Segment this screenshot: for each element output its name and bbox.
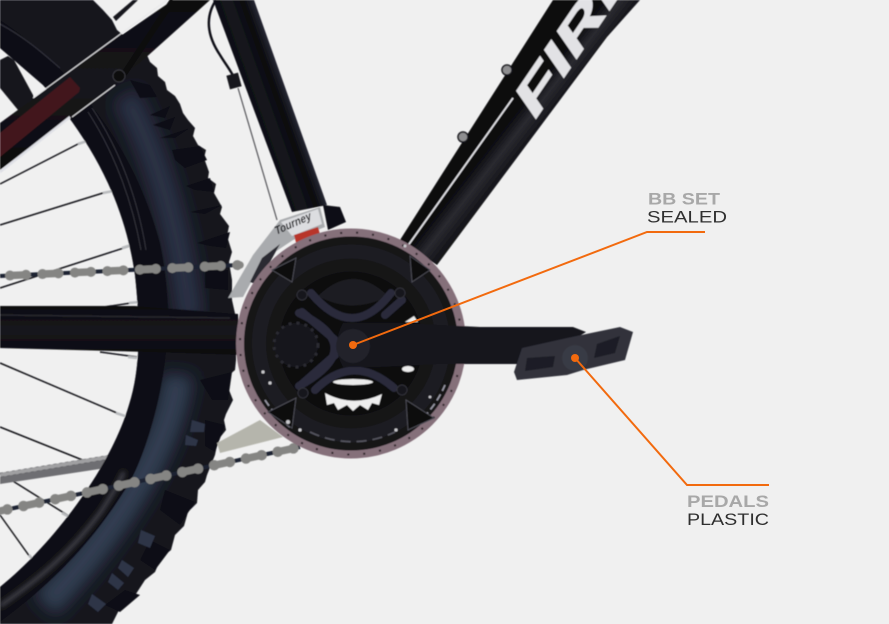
spider arms: [299, 293, 402, 390]
rim: [0, 20, 168, 622]
guard fins: [268, 256, 434, 430]
guard outer ring: [236, 228, 466, 458]
tube edge highlight: [407, 98, 513, 247]
bracket: [113, 70, 125, 82]
seat tube: [213, 0, 327, 212]
derailleur red tag: [294, 227, 321, 246]
front derailleur: [228, 205, 346, 298]
guard glints: [261, 244, 431, 432]
rim lines: [0, 24, 146, 250]
label value: PLASTIC: [687, 511, 769, 529]
bottle bolts: [502, 65, 512, 75]
upper chain run: [0, 265, 240, 276]
rear cassette bar: [0, 455, 110, 484]
leader line: [353, 232, 705, 345]
chainring guard and chainrings: [236, 228, 466, 458]
chain stay: [0, 306, 240, 355]
down tube with logo: [400, 0, 643, 265]
derailleur clamp: [323, 205, 346, 230]
tire body: [0, 0, 236, 624]
crank hub: [336, 329, 370, 363]
bicycle photo illustration: [0, 0, 643, 624]
leader line: [575, 358, 769, 485]
lower chain run: [0, 447, 300, 511]
tire knobs: [105, 80, 232, 612]
wheel spokes: [0, 141, 139, 561]
chainring teeth windows: [274, 279, 418, 411]
guard disc: [244, 236, 458, 450]
pedal spindle: [562, 345, 588, 371]
chainring bolts: [297, 288, 407, 398]
label heading: PEDALS: [687, 493, 769, 511]
crank arm: [336, 323, 586, 367]
callout: BB set: [349, 190, 727, 349]
pedal windows: [525, 356, 555, 371]
label value: SEALED: [647, 208, 727, 226]
guard lower highlights: [265, 385, 445, 442]
rear brake: [0, 56, 35, 110]
thin brace tube: [113, 0, 138, 21]
leader dot: [349, 341, 357, 349]
rear tire: [0, 0, 236, 624]
red decal: [0, 77, 80, 157]
silver rear stay plate: [217, 420, 283, 453]
callout: pedals: [571, 354, 769, 529]
stay highlights: [33, 0, 167, 98]
seat stay tube: [0, 0, 210, 172]
tire highlights: [45, 95, 190, 605]
leader dot: [571, 354, 579, 362]
pedal: [514, 327, 633, 380]
logo text: FIRE: [508, 0, 643, 132]
brake cable: [209, 0, 277, 220]
derailleur label: Tourney: [274, 209, 313, 238]
label heading: BB SET: [648, 190, 720, 208]
